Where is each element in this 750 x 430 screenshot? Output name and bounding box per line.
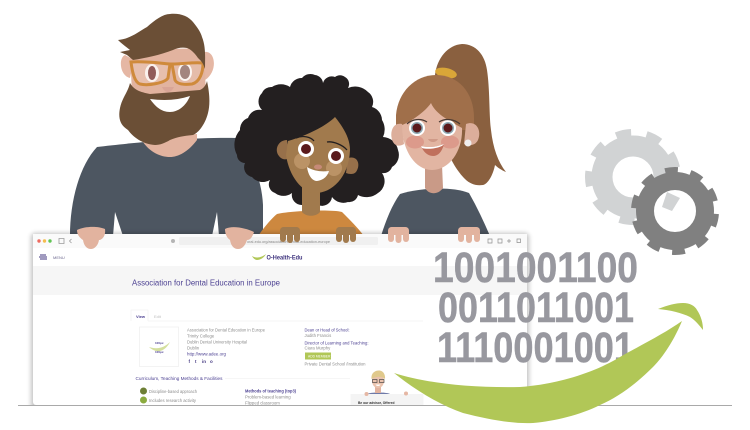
school address: Trinity College: [187, 334, 215, 338]
logo swoosh small: [149, 342, 170, 351]
curly woman right hand: [336, 227, 356, 243]
page title: Association for Dental Education in Europe: [132, 278, 281, 288]
man neck: [143, 134, 197, 157]
man glasses: [131, 62, 203, 85]
green swoosh: [394, 303, 703, 423]
dark gear: [633, 169, 717, 253]
man ears: [121, 52, 214, 80]
browser window: [33, 234, 527, 406]
logo text: O-Health-Edu: [266, 254, 303, 262]
eyes: [409, 120, 456, 136]
staff details: [304, 328, 368, 366]
ponytail woman left hand: [388, 227, 409, 243]
illustration: bearded man: [70, 14, 263, 236]
social icons: o: [210, 359, 213, 364]
nose: [428, 139, 438, 142]
staff details: Ciara Murphy: [304, 346, 331, 350]
teaching methods: [245, 388, 297, 406]
school address: [187, 328, 266, 356]
ponytail woman right hand: [458, 227, 480, 243]
ears: [391, 123, 479, 146]
feature text 1: Discipline-based approach: [149, 389, 198, 394]
tab edit: Edit: [154, 314, 162, 319]
shirt orange: [258, 211, 364, 236]
feature icon 1: [140, 388, 147, 394]
add member button: [305, 352, 331, 360]
social icons: f: [188, 359, 190, 364]
dark gear hole backing: [653, 189, 697, 233]
teaching methods: Flipped classroom: [245, 400, 280, 406]
toolbar: [33, 234, 527, 245]
hair head: [396, 75, 474, 130]
social icons: in: [202, 359, 206, 364]
address text: oral-edu.org/association-dental-education-europe: [247, 240, 330, 244]
curly woman left hand: [280, 227, 300, 243]
placeholder text 2: 100px: [155, 350, 164, 354]
logo swoosh: [252, 254, 266, 260]
illustration: woman with ponytail: [381, 44, 506, 236]
nose: [314, 164, 322, 170]
feature text 2: Includes research activity: [149, 398, 197, 403]
binary digits: 1001001100: [433, 244, 638, 292]
advisor glasses: [372, 380, 384, 382]
advisor card: [350, 370, 424, 406]
address bar: [179, 237, 378, 245]
illustration: woman with curly hair: [234, 74, 399, 236]
man beard: [119, 81, 209, 145]
school address: Association for Dental Education in Europe: [187, 328, 266, 332]
baseline rule: [18, 404, 732, 406]
advisor shirt: [367, 392, 390, 394]
feature list: [140, 388, 198, 404]
toolbar left icons: [59, 238, 72, 244]
staff details: Judith Francis: [304, 333, 331, 338]
mouth: [421, 144, 444, 156]
man eyes: [145, 63, 192, 82]
ponytail: [435, 44, 506, 185]
toolbar right icons: [488, 239, 520, 243]
man mouth: [150, 96, 190, 112]
neck: [302, 185, 320, 216]
light gear: [584, 128, 682, 226]
advisor neck: [375, 387, 381, 393]
brows: [296, 137, 347, 150]
tab divider: [148, 320, 423, 322]
shield icon: [171, 239, 175, 243]
traffic lights: [37, 239, 52, 243]
gears: [584, 128, 717, 253]
swoosh body: [394, 321, 682, 423]
eyes: [298, 141, 344, 164]
staff details: Dean or Head of School:: [304, 328, 350, 332]
man right hand: [225, 227, 254, 249]
school address: Dublin Dental University Hospital: [187, 340, 247, 344]
binary digits: 1110001001: [437, 324, 634, 372]
teaching methods: Methods of teaching (top3): [245, 388, 297, 394]
browser shadow: [31, 233, 529, 413]
tabs: [131, 310, 423, 321]
brows: [407, 120, 460, 124]
site logo: [252, 254, 302, 260]
school address: http://www.adee.org: [187, 352, 227, 356]
advisor head: [372, 374, 384, 388]
man shirt: [70, 138, 263, 236]
curly hair: [234, 74, 399, 208]
staff details: Private Dental School /Institution: [304, 362, 366, 366]
menu label: MENU: [53, 255, 65, 260]
cheeks: [294, 153, 342, 176]
binary digits: 0011011001: [438, 284, 634, 332]
man nose: [162, 87, 174, 92]
scrunchie: [434, 66, 458, 80]
section rule: [225, 378, 350, 379]
neck: [425, 165, 443, 193]
earring: [464, 140, 472, 146]
man hair: [118, 14, 205, 69]
hands on browser edge: [77, 227, 480, 249]
advisor mouth: [376, 384, 380, 386]
social icons: [188, 360, 213, 363]
light gear notch: [662, 192, 680, 211]
advisor text: Be our advisor, Offered: [358, 401, 394, 405]
social icons: t: [195, 359, 197, 364]
swoosh tip: [658, 303, 703, 330]
advisor hair: [371, 370, 385, 379]
man left hand: [77, 227, 105, 249]
face: [402, 103, 462, 170]
advisor hands: [364, 392, 408, 396]
button label: ADD MEMBER: [308, 354, 331, 358]
mouth: [307, 167, 329, 181]
staff details: Director of Learning and Teaching:: [304, 340, 368, 346]
man face: [130, 48, 206, 95]
shirt: [381, 189, 490, 236]
menu icon: [39, 255, 47, 259]
section heading: Curriculum, Teaching Methods & Facilities: [136, 376, 223, 382]
school logo box: [140, 327, 178, 366]
binary digits: [433, 244, 638, 372]
face: [286, 117, 350, 193]
teaching methods: Problem-based learning: [245, 394, 291, 400]
title band: [33, 266, 527, 295]
placeholder text: 100px: [155, 341, 164, 345]
cheeks: [406, 136, 459, 148]
feature icon 2: [140, 396, 147, 404]
ears: [277, 140, 358, 174]
school address: Dublin: [187, 346, 200, 350]
tab view: View: [136, 314, 146, 319]
